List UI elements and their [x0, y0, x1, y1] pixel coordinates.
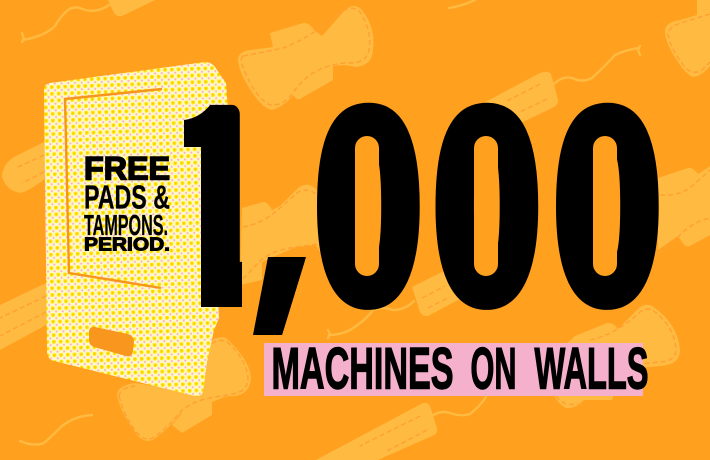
- big number: 1,000: ,: [231, 65, 392, 356]
- big number: 1,000: 0: [555, 57, 660, 356]
- machine label text: FREE: [84, 150, 170, 186]
- pad: top right: [665, 0, 710, 77]
- tampon: left upper: [2, 141, 46, 193]
- caption text: MACHINES: [272, 336, 454, 402]
- machine display frame: [65, 89, 162, 288]
- big number: 1,000: 1: [146, 56, 274, 355]
- machine label text: [84, 150, 170, 254]
- big number: 1,000: 0: [316, 57, 421, 356]
- pad: centre: [240, 185, 330, 285]
- machine label text: TAMPONS.: [84, 210, 168, 242]
- tampon: top centre: [449, 0, 640, 140]
- caption pink highlight: [264, 343, 643, 396]
- tampon string: lower left: [20, 415, 92, 445]
- pad: lower right: [552, 305, 680, 408]
- caption: machines on walls: [264, 336, 648, 402]
- coin slot: [89, 327, 134, 356]
- vending machine: [44, 62, 228, 396]
- tampon: middle gap: [328, 268, 462, 338]
- pad: top centre: [238, 6, 374, 110]
- big number: 1,000: 0: [434, 57, 540, 356]
- machine body: [44, 62, 228, 396]
- tampon: bottom centre: [316, 397, 486, 460]
- tampon: left lower: [0, 282, 48, 350]
- caption text: ON: [470, 336, 516, 402]
- pad: lower left: [117, 383, 225, 441]
- machine label text: PERIOD.: [84, 234, 170, 254]
- machine label text: PADS &: [84, 178, 170, 216]
- tampon: top left: [22, 0, 155, 42]
- big number: 1,000: [184, 102, 659, 335]
- pad: right edge: [658, 165, 710, 250]
